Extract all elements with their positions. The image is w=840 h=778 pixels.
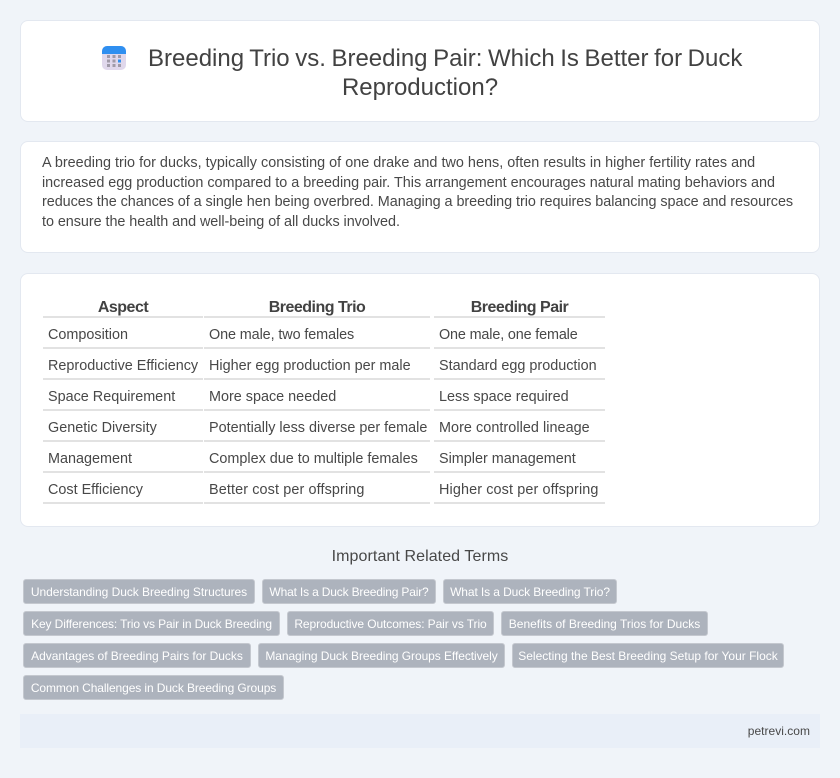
- comparison table: Standard egg production: [439, 358, 597, 374]
- comparison table: Higher cost per offspring: [439, 482, 599, 498]
- comparison table: More space needed: [209, 389, 336, 405]
- footer bar: [20, 714, 820, 748]
- comparison table: Better cost per offspring: [209, 482, 365, 498]
- title: Reproduction?: [342, 74, 498, 101]
- related terms heading: Important Related Terms: [332, 548, 508, 565]
- comparison table: Reproductive Efficiency: [48, 358, 198, 374]
- comparison table: Composition: [48, 327, 128, 343]
- comparison table: Space Requirement: [48, 389, 175, 405]
- comparison table: Higher egg production per male: [209, 358, 411, 374]
- title: [148, 45, 742, 101]
- comparison table: Less space required: [439, 389, 569, 405]
- related terms tags: Managing Duck Breeding Groups Effectively: [265, 649, 498, 663]
- comparison table: Breeding Pair: [471, 299, 568, 316]
- related terms tags: Reproductive Outcomes: Pair vs Trio: [294, 617, 487, 631]
- related terms tags: Key Differences: Trio vs Pair in Duck Breeding: [31, 617, 272, 631]
- intro paragraph: [42, 155, 793, 230]
- related terms tags: Benefits of Breeding Trios for Ducks: [509, 617, 700, 631]
- comparison table: Management: [48, 451, 132, 467]
- related terms tags: What Is a Duck Breeding Trio?: [450, 585, 610, 599]
- comparison table: More controlled lineage: [439, 420, 590, 436]
- comparison table: [43, 299, 605, 504]
- intro text panel: [20, 141, 820, 253]
- intro paragraph: increased egg production compared to a breeding pair. This arrangement encourages natural mating behaviors and: [42, 174, 775, 190]
- related terms tags: Common Challenges in Duck Breeding Groups: [31, 681, 276, 695]
- intro paragraph: A breeding trio for ducks, typically consisting of one drake and two hens, often results in higher fertility rates and: [42, 155, 755, 171]
- related terms tags: Understanding Duck Breeding Structures: [31, 585, 247, 599]
- comparison table: Potentially less diverse per female: [209, 420, 427, 436]
- comparison table: Cost Efficiency: [48, 482, 143, 498]
- comparison table: Genetic Diversity: [48, 420, 157, 436]
- intro paragraph: reduces the chances of a single hen being overbred. Managing a breeding trio requires balancing space and resources: [42, 194, 793, 210]
- comparison table: Breeding Trio: [269, 299, 365, 316]
- comparison table: One male, two females: [209, 327, 354, 343]
- comparison table: Complex due to multiple females: [209, 451, 418, 467]
- comparison table panel: [20, 273, 820, 527]
- related terms tags: Advantages of Breeding Pairs for Ducks: [31, 649, 243, 663]
- comparison table: Simpler management: [439, 451, 576, 467]
- intro paragraph: to ensure the health and well-being of all ducks involved.: [42, 214, 400, 230]
- title: Breeding Trio vs. Breeding Pair: Which Is Better for Duck: [148, 45, 742, 72]
- comparison table: Aspect: [98, 299, 148, 316]
- related terms tags: What Is a Duck Breeding Pair?: [269, 585, 429, 599]
- header panel: [20, 20, 820, 122]
- related terms tags: Selecting the Best Breeding Setup for Your Flock: [518, 649, 778, 663]
- icon: calendar: [102, 46, 126, 70]
- related terms tags: [23, 579, 784, 700]
- footer source: petrevi.com: [748, 724, 810, 738]
- comparison table: One male, one female: [439, 327, 578, 343]
